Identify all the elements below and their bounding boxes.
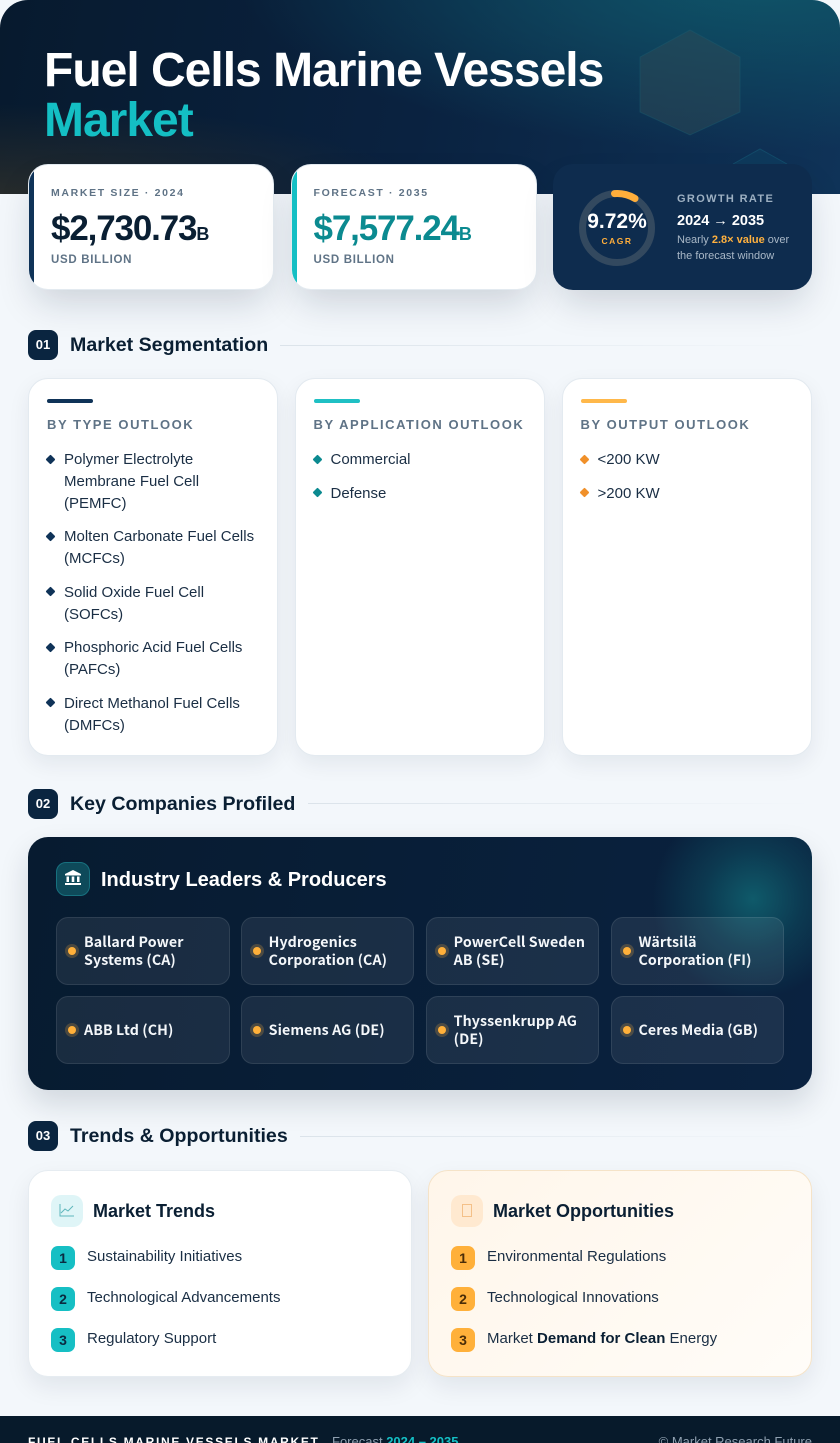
panel: by output: [562, 378, 812, 756]
panel heading: BY OUTPUT OUTLOOK: [580, 417, 750, 432]
stat card: market size: [28, 164, 274, 290]
number badge: 1: [59, 1250, 67, 1266]
company: Thyssenkrupp AG: [454, 1010, 577, 1030]
number badge: [451, 1246, 475, 1270]
growth years: 2024 → 2035: [677, 213, 764, 229]
company: [56, 917, 230, 985]
panel heading: BY APPLICATION OUTLOOK: [314, 417, 524, 432]
section heading: companies: Key Companies Profiled: [70, 793, 295, 815]
list item: [64, 639, 242, 678]
list item: (PEMFC): [64, 495, 126, 512]
company: (DE): [454, 1029, 484, 1049]
stat card: forecast: USD BILLION: [314, 254, 395, 266]
opportunity item: Environmental Regulations: [487, 1248, 666, 1264]
list item: [64, 584, 204, 623]
company: PowerCell Sweden: [454, 932, 585, 952]
company: [426, 996, 599, 1064]
panel heading: Industry Leaders & Producers: [101, 868, 387, 890]
section number 02: [28, 789, 58, 819]
hero header band: [0, 0, 840, 194]
panel: market trends: [28, 1170, 412, 1377]
title: Fuel Cells Marine Vessels: [44, 44, 603, 97]
icon: placeholder glyph: [451, 1195, 483, 1227]
opportunity item: Market Demand for Clean Energy: [487, 1330, 717, 1346]
number badge: 2: [459, 1291, 467, 1307]
list item: (PAFCs): [64, 661, 120, 678]
list item: [64, 451, 199, 512]
company: [56, 996, 230, 1064]
panel: by type: [28, 378, 278, 756]
company: ABB Ltd (CH): [84, 1020, 173, 1040]
CAGR ring: [579, 190, 655, 266]
panel: by application: [294, 378, 544, 756]
number badge: [51, 1287, 75, 1311]
company: [610, 917, 784, 985]
company: Systems (CA): [84, 950, 176, 970]
CAGR value: 9.72%: [587, 210, 647, 233]
section heading: trends: Trends & Opportunities: [70, 1125, 288, 1147]
stat card: growth rate: [553, 164, 812, 290]
list item: [64, 528, 254, 567]
company: [241, 917, 414, 985]
company: Ballard Power: [84, 932, 183, 952]
number badge: 3: [459, 1332, 467, 1348]
list item: >200 KW: [598, 484, 660, 502]
list item: (SOFCs): [64, 606, 123, 623]
panel heading: Market Trends: [93, 1201, 215, 1221]
company: [426, 917, 599, 985]
company: Corporation (FI): [638, 950, 752, 970]
stat card: market size: MARKET SIZE · 2024: [51, 187, 185, 199]
decorative triangle: [733, 148, 787, 164]
stat card: market size: $2,730.73B: [51, 209, 209, 248]
number badge: [451, 1287, 475, 1311]
title: [44, 44, 603, 146]
list item: Direct Methanol Fuel Cells: [64, 695, 240, 712]
number badge: [51, 1246, 75, 1270]
section number 01: [28, 330, 58, 360]
number badge: [451, 1328, 475, 1352]
section number 02: 02: [36, 796, 50, 811]
stat card: market size: USD BILLION: [51, 254, 132, 266]
section number 01: 01: [36, 337, 50, 352]
list item: Solid Oxide Fuel Cell: [64, 584, 204, 601]
company: AB (SE): [454, 950, 505, 970]
growth label: GROWTH RATE: [677, 192, 774, 204]
number badge: [51, 1328, 75, 1352]
growth note: [677, 234, 789, 262]
title: Market: [44, 94, 193, 146]
section number 03: 03: [36, 1128, 50, 1143]
trend item: Technological Advancements: [87, 1288, 280, 1306]
footer: [0, 1416, 840, 1443]
list item: Commercial: [330, 451, 411, 468]
stat card: forecast: $7,577.24B: [314, 209, 472, 248]
opportunity item: Technological Innovations: [487, 1288, 659, 1306]
section number 03: [28, 1121, 58, 1151]
panel: companies: [28, 837, 812, 1090]
section heading: segmentation: Market Segmentation: [70, 334, 268, 356]
stat card: forecast: [290, 164, 536, 290]
panel: market opportunities: [428, 1170, 812, 1377]
company: Siemens AG (DE): [269, 1020, 385, 1040]
list item: Defense: [330, 484, 386, 502]
icon: line chart: [51, 1195, 83, 1227]
icon: institution: [56, 862, 90, 896]
CAGR label: CAGR: [601, 236, 633, 246]
number badge: 2: [59, 1291, 67, 1307]
company: Hydrogenics: [269, 932, 357, 952]
growth note: Nearly 2.8× value over: [677, 234, 789, 246]
company: [241, 996, 414, 1064]
list item: (DMFCs): [64, 717, 125, 734]
company: [610, 996, 784, 1064]
stat card: forecast: FORECAST · 2035: [314, 187, 429, 199]
list item: (MCFCs): [64, 550, 125, 567]
list item: Molten Carbonate Fuel Cells: [64, 528, 254, 545]
company: Ceres Media (GB): [638, 1020, 758, 1040]
list item: [64, 695, 240, 734]
trend item: Sustainability Initiatives: [87, 1248, 242, 1264]
list item: Membrane Fuel Cell: [64, 473, 199, 490]
number badge: 1: [459, 1250, 467, 1266]
company: Wärtsilä: [638, 932, 697, 952]
list item: <200 KW: [598, 451, 660, 468]
list item: Polymer Electrolyte: [64, 451, 193, 468]
trend item: Regulatory Support: [87, 1330, 216, 1346]
number badge: 3: [59, 1332, 67, 1348]
growth note: the forecast window: [677, 250, 774, 262]
panel heading: Market Opportunities: [493, 1201, 674, 1221]
panel heading: BY TYPE OUTLOOK: [47, 417, 194, 432]
list item: Phosphoric Acid Fuel Cells: [64, 639, 242, 656]
decorative hexagon: [640, 30, 740, 136]
company: Corporation (CA): [269, 950, 387, 970]
